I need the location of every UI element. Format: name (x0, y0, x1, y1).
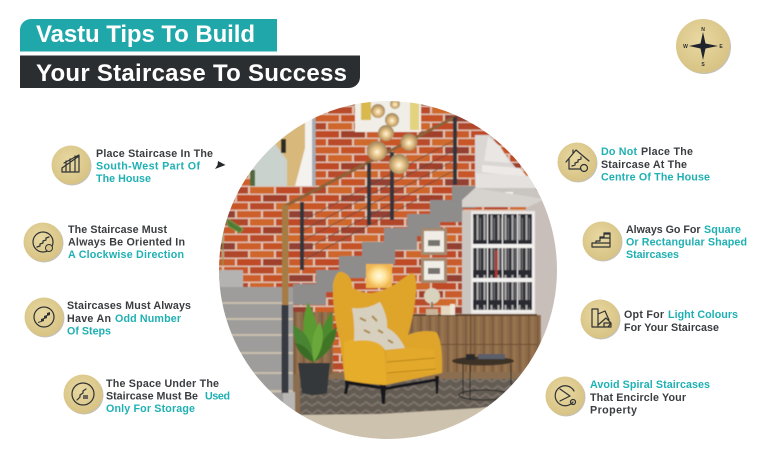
painting: top wall (355, 98, 421, 132)
tip: not in centre: Do Not (601, 146, 637, 158)
icon: staircase with railing (52, 146, 92, 186)
tip: not in centre (558, 142, 710, 184)
tip: avoid spiral staircases: That Encircle Your (590, 392, 686, 404)
tip: south-west placement: The House (96, 173, 151, 185)
pendant lights (367, 99, 418, 174)
icon: storage stairs (64, 374, 104, 414)
tip: south-west placement: Place Staircase In The (96, 148, 213, 160)
icon: square steps (582, 222, 622, 262)
tip: square or rectangular: Always Go For (626, 224, 700, 236)
light floor (300, 406, 488, 439)
coffee table (452, 354, 514, 400)
rug (300, 378, 517, 415)
icon: odd steps (24, 298, 64, 338)
title line 1 banner: Vastu Tips To Build (36, 21, 255, 48)
tip: light colours: Opt For (624, 309, 664, 321)
decor on cabinet (424, 288, 455, 315)
wall frames (421, 228, 447, 283)
tip: odd number of steps (24, 298, 191, 338)
icon: colour swatches (580, 300, 620, 340)
tip: light colours (580, 300, 738, 340)
upper white stairs (474, 134, 540, 198)
tip: odd number of steps: Have An (67, 313, 111, 325)
painting: left wall (250, 118, 316, 186)
staircase photo (215, 97, 562, 445)
icon: clockwise stairs (24, 222, 64, 262)
right wall (525, 200, 557, 344)
left stair base (282, 391, 296, 412)
tip: storage under staircase: Only For Storage (106, 403, 195, 415)
icon: spiral avoid (546, 376, 586, 416)
tip: storage under staircase: Staircase Must Be (106, 390, 198, 402)
tip: square or rectangular: Or Rectangular Shaped (626, 236, 747, 248)
tip: storage under staircase: Used (205, 390, 230, 402)
tip: clockwise direction: The Staircase Must (68, 224, 167, 236)
tip: south-west placement (52, 146, 213, 186)
icon: small arrow (215, 161, 226, 169)
tip: light colours: For Your Staircase (624, 322, 719, 334)
tip: south-west placement: South-West Part Of (96, 160, 200, 172)
tip: light colours: Light Colours (668, 309, 738, 321)
tip: not in centre: Staircase At The (601, 159, 687, 171)
tip: square or rectangular: Square (704, 224, 741, 236)
tip: odd number of steps: Odd Number (115, 313, 181, 325)
tip: clockwise direction: A Clockwise Direction (68, 249, 184, 261)
bookcase (462, 211, 535, 314)
title line 2 banner: Your Staircase To Success (36, 60, 347, 87)
tip: square or rectangular: Staircases (626, 249, 679, 261)
tip: avoid spiral staircases: Property (590, 404, 637, 416)
ceiling (462, 188, 545, 207)
title (20, 19, 360, 88)
wall plant leaf (223, 218, 243, 265)
icon: compass: W (683, 44, 688, 50)
icon: compass: N (701, 27, 705, 33)
tip: clockwise direction: Always Be Oriented In (68, 236, 185, 248)
left grey stairs (219, 270, 293, 405)
tip: not in centre: Place The (641, 146, 693, 158)
tip: odd number of steps: Staircases Must Always (67, 300, 191, 312)
tip: avoid spiral staircases: Avoid Spiral Staircases (590, 379, 710, 391)
tip: avoid spiral staircases (546, 376, 710, 416)
yellow armchair (333, 272, 442, 404)
table lamp glow (366, 264, 392, 288)
icon: compass: E (719, 44, 723, 50)
tip: square or rectangular (582, 222, 747, 262)
icon: house with stairs (558, 142, 598, 182)
concrete staircase (293, 172, 476, 305)
tip: storage under staircase (64, 374, 230, 415)
handrail and balusters (285, 117, 457, 270)
cabinet (408, 314, 541, 373)
tip: odd number of steps: Of Steps (67, 326, 111, 338)
stair post (282, 205, 288, 393)
plant in pot (293, 302, 337, 395)
icon: compass: S (701, 62, 705, 68)
floor (292, 372, 522, 414)
tip: storage under staircase: The Space Under The (106, 378, 219, 390)
icon: compass (676, 19, 731, 74)
tip: clockwise direction (24, 222, 185, 262)
tip: not in centre: Centre Of The House (601, 172, 710, 184)
